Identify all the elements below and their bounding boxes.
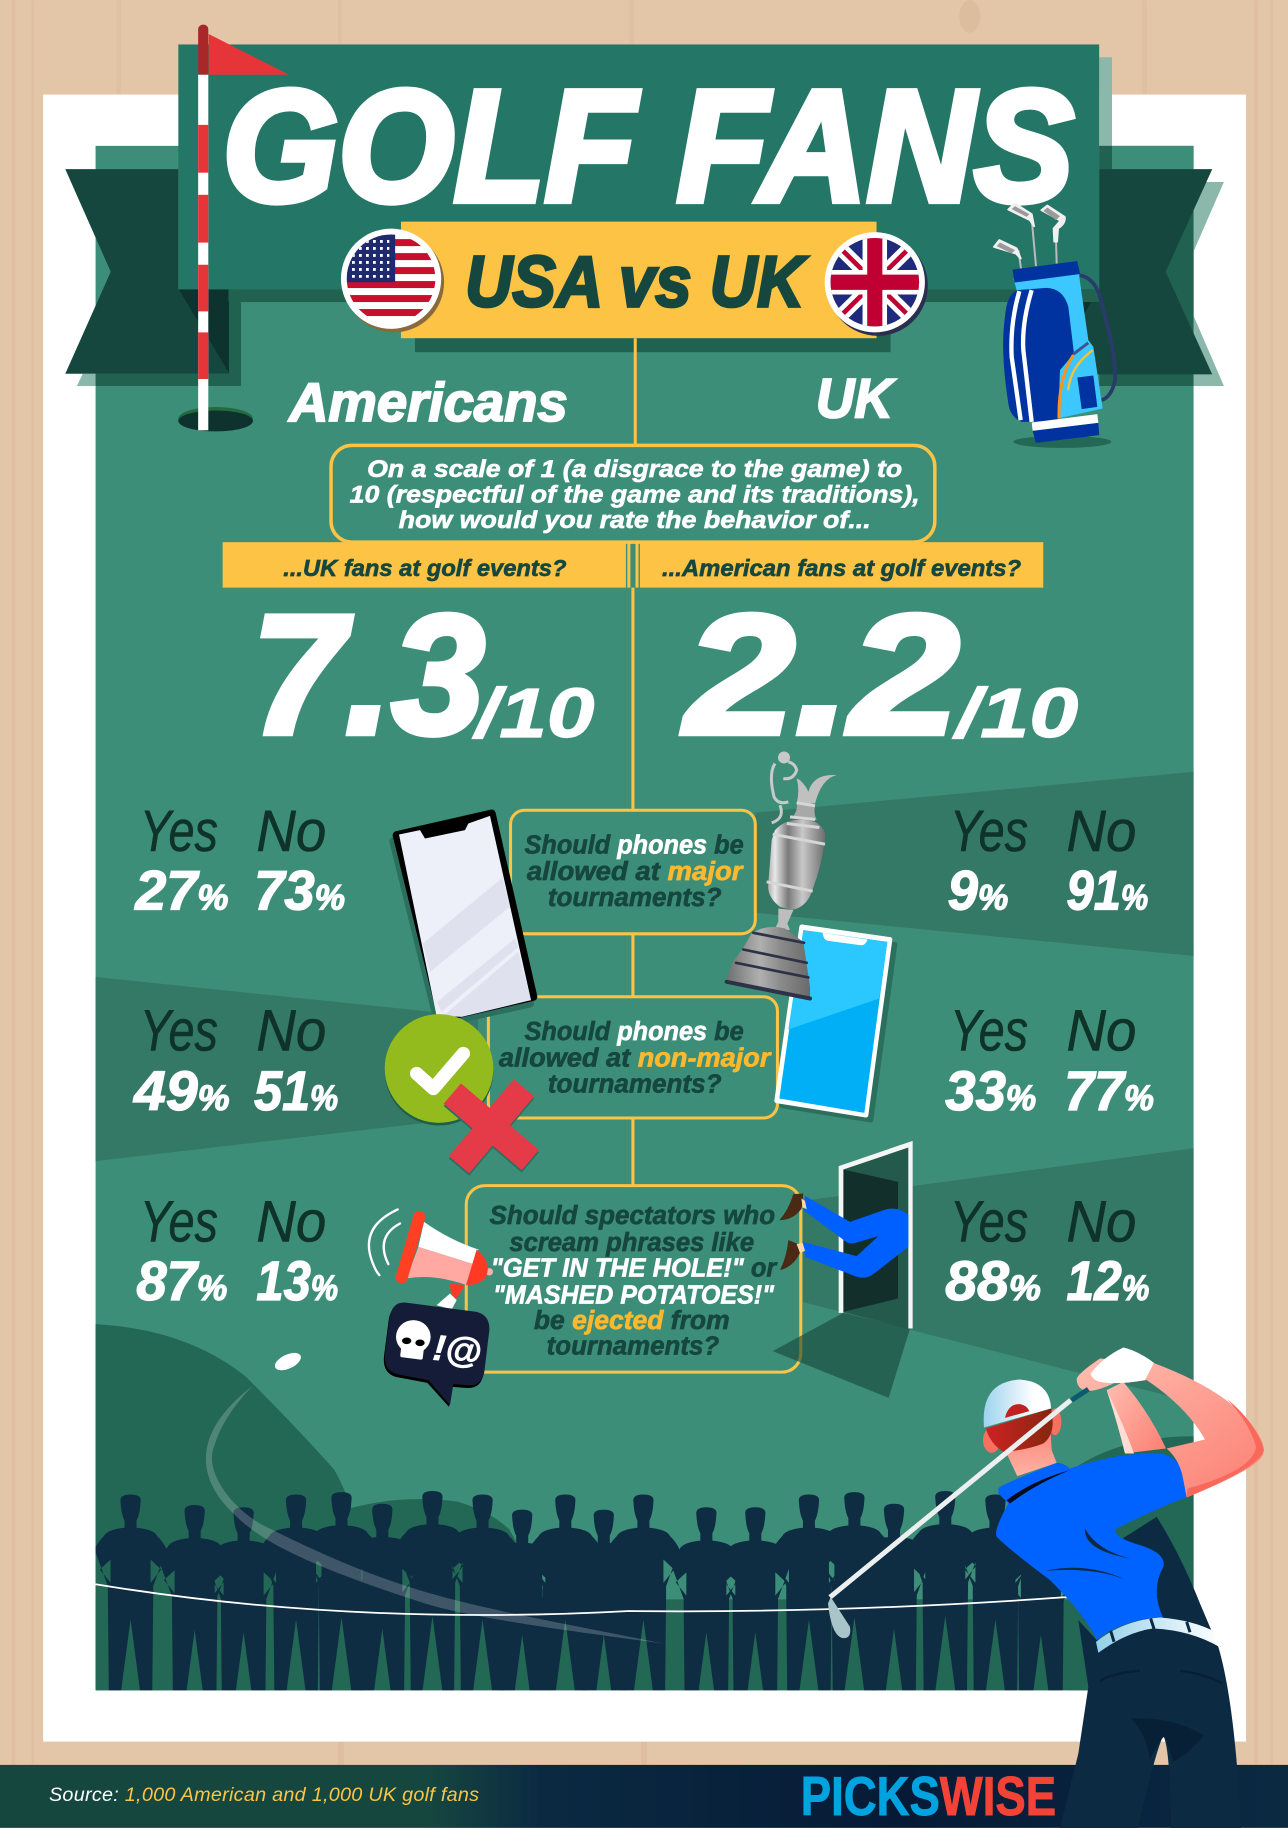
cap brim [986, 1408, 1053, 1452]
question box: behaviour rating: 10 (respectful of the game and its traditions), [350, 482, 920, 509]
subtitle plate: USA vs UK [401, 222, 891, 352]
label: American fans [640, 542, 1043, 588]
logo: Pickswise: PICKSWISE [801, 1765, 1056, 1827]
stats row 2: Americans: 51% [254, 1059, 338, 1122]
stats row 3: Americans: No [256, 1190, 326, 1255]
question box: behaviour rating [331, 445, 935, 542]
heading: UK: UK [816, 366, 896, 429]
label: UK fans: ...UK fans at golf events? [283, 555, 566, 581]
icon: blue phone [777, 927, 895, 1120]
ball flight swoosh [206, 1385, 664, 1644]
golf club [830, 1400, 1071, 1597]
icon: claret jug trophy [727, 751, 837, 998]
icon: green tick [385, 1014, 493, 1125]
stats row 2: UK [945, 998, 1154, 1122]
stats row 1: UK: No [1067, 799, 1136, 864]
score: 2.2 out of 10: /10 [952, 674, 1078, 752]
question box: non-major tournaments [488, 997, 777, 1118]
stats row 2: Americans: Yes [140, 998, 218, 1063]
question box: ejecting spectators [466, 1186, 801, 1372]
stats row 3: UK [945, 1190, 1149, 1312]
trousers [1060, 1517, 1241, 1828]
stats row 3: UK: 12% [1067, 1249, 1149, 1312]
icon: USA flag [341, 229, 444, 332]
connector: centre line [629, 338, 637, 1186]
ribbon: left [65, 169, 241, 386]
stats row 3: Americans: 87% [136, 1249, 227, 1312]
question box: behaviour rating: On a scale of 1 (a disgrace to the game) to [367, 456, 902, 483]
stats row 3: Americans: Yes [140, 1190, 218, 1255]
question box: major tournaments: tournaments? [548, 884, 722, 912]
footer bar [0, 1765, 1288, 1828]
far arm [1107, 1382, 1166, 1453]
stats row 2: Americans: No [256, 998, 326, 1063]
stats row 1: UK: 91% [1067, 858, 1148, 921]
stats row 3: UK: No [1067, 1190, 1136, 1255]
question box: major tournaments: allowed at major [527, 858, 745, 886]
leading arm [1077, 1358, 1264, 1497]
stats row 1: UK: Yes [950, 799, 1028, 864]
icon: golf ball [272, 1349, 304, 1374]
belt [1096, 1617, 1219, 1653]
score: 2.2 out of 10 [682, 580, 1078, 770]
question box: ejecting spectators: Should spectators who [490, 1202, 775, 1230]
icon: golf flag and hole [178, 25, 289, 431]
title banner [178, 44, 1099, 302]
score: 2.2 out of 10: 2.2 [682, 580, 959, 770]
icon: UK flag [825, 232, 928, 336]
icon: golf bag [994, 203, 1115, 448]
heading: Americans: Americans [287, 371, 568, 433]
stats row 1: Americans: Yes [140, 799, 218, 864]
stats row 2: Americans: 49% [133, 1059, 230, 1122]
stats row 2: UK: 77% [1064, 1059, 1154, 1122]
question box: major tournaments [511, 810, 755, 934]
score: 7.3 out of 10 [252, 580, 595, 770]
source note: Source: 1,000 American and 1,000 UK golf fans [49, 1784, 479, 1806]
stats row 1: Americans: No [256, 799, 326, 864]
stats row 1: Americans: 73% [254, 858, 345, 921]
icon: swearing speech bubble: !@ [431, 1327, 484, 1373]
question box: ejecting spectators: tournaments? [547, 1333, 720, 1361]
stats row 1: Americans: 27% [134, 858, 228, 921]
shirt [996, 1453, 1188, 1640]
stats row 2: UK: No [1067, 998, 1136, 1063]
icon: red cross [452, 1088, 530, 1167]
stats row 2: Americans [133, 998, 338, 1122]
subtitle text: USA vs UK [465, 243, 809, 323]
stats row 3: Americans [136, 1190, 338, 1312]
illustration: golfer [828, 1347, 1264, 1828]
ribbon: right [1049, 57, 1224, 386]
question box: ejecting spectators: scream phrases like [509, 1229, 754, 1257]
glove [1091, 1347, 1154, 1383]
label: UK fans [223, 542, 626, 588]
question box: non-major tournaments: tournaments? [548, 1070, 722, 1098]
neck and ears [1007, 1420, 1057, 1476]
icon: white phone [393, 813, 533, 1024]
question box: ejecting spectators: be ejected from [534, 1307, 730, 1335]
label: American fans: ...American fans at golf events? [662, 555, 1021, 581]
question box: major tournaments: Should phones be [525, 831, 744, 859]
stats row 1: UK [948, 799, 1148, 921]
question box: ejecting spectators: "GET IN THE HOLE!" or [491, 1255, 778, 1283]
icon: door with ejected spectator [773, 1141, 913, 1398]
question box: behaviour rating: how would you rate the behavior of... [399, 507, 871, 534]
icon: swearing speech bubble [384, 1302, 489, 1407]
stats row 1: UK: 9% [948, 858, 1008, 921]
question box: non-major tournaments: Should phones be [525, 1018, 744, 1046]
stats row 2: UK: 33% [945, 1059, 1036, 1122]
cap [984, 1379, 1051, 1427]
question box: non-major tournaments: allowed at non-major [499, 1045, 773, 1073]
stats row 1: Americans [134, 799, 345, 921]
rope [96, 1584, 1068, 1615]
question box: ejecting spectators: "MASHED POTATOES!" [493, 1281, 775, 1309]
stats row 2: UK: Yes [950, 998, 1028, 1063]
score: 7.3 out of 10: 7.3 [252, 580, 485, 770]
stats row 3: UK: 88% [945, 1249, 1041, 1312]
crowd silhouettes [95, 1491, 1077, 1710]
score: 7.3 out of 10: /10 [472, 674, 595, 752]
green panel with light beams [96, 146, 1194, 1690]
icon: megaphone [369, 1209, 493, 1309]
stats row 3: UK: Yes [950, 1190, 1028, 1255]
club head [828, 1597, 850, 1638]
stats row 3: Americans: 13% [256, 1249, 338, 1312]
title: GOLF FANS [223, 57, 1074, 235]
